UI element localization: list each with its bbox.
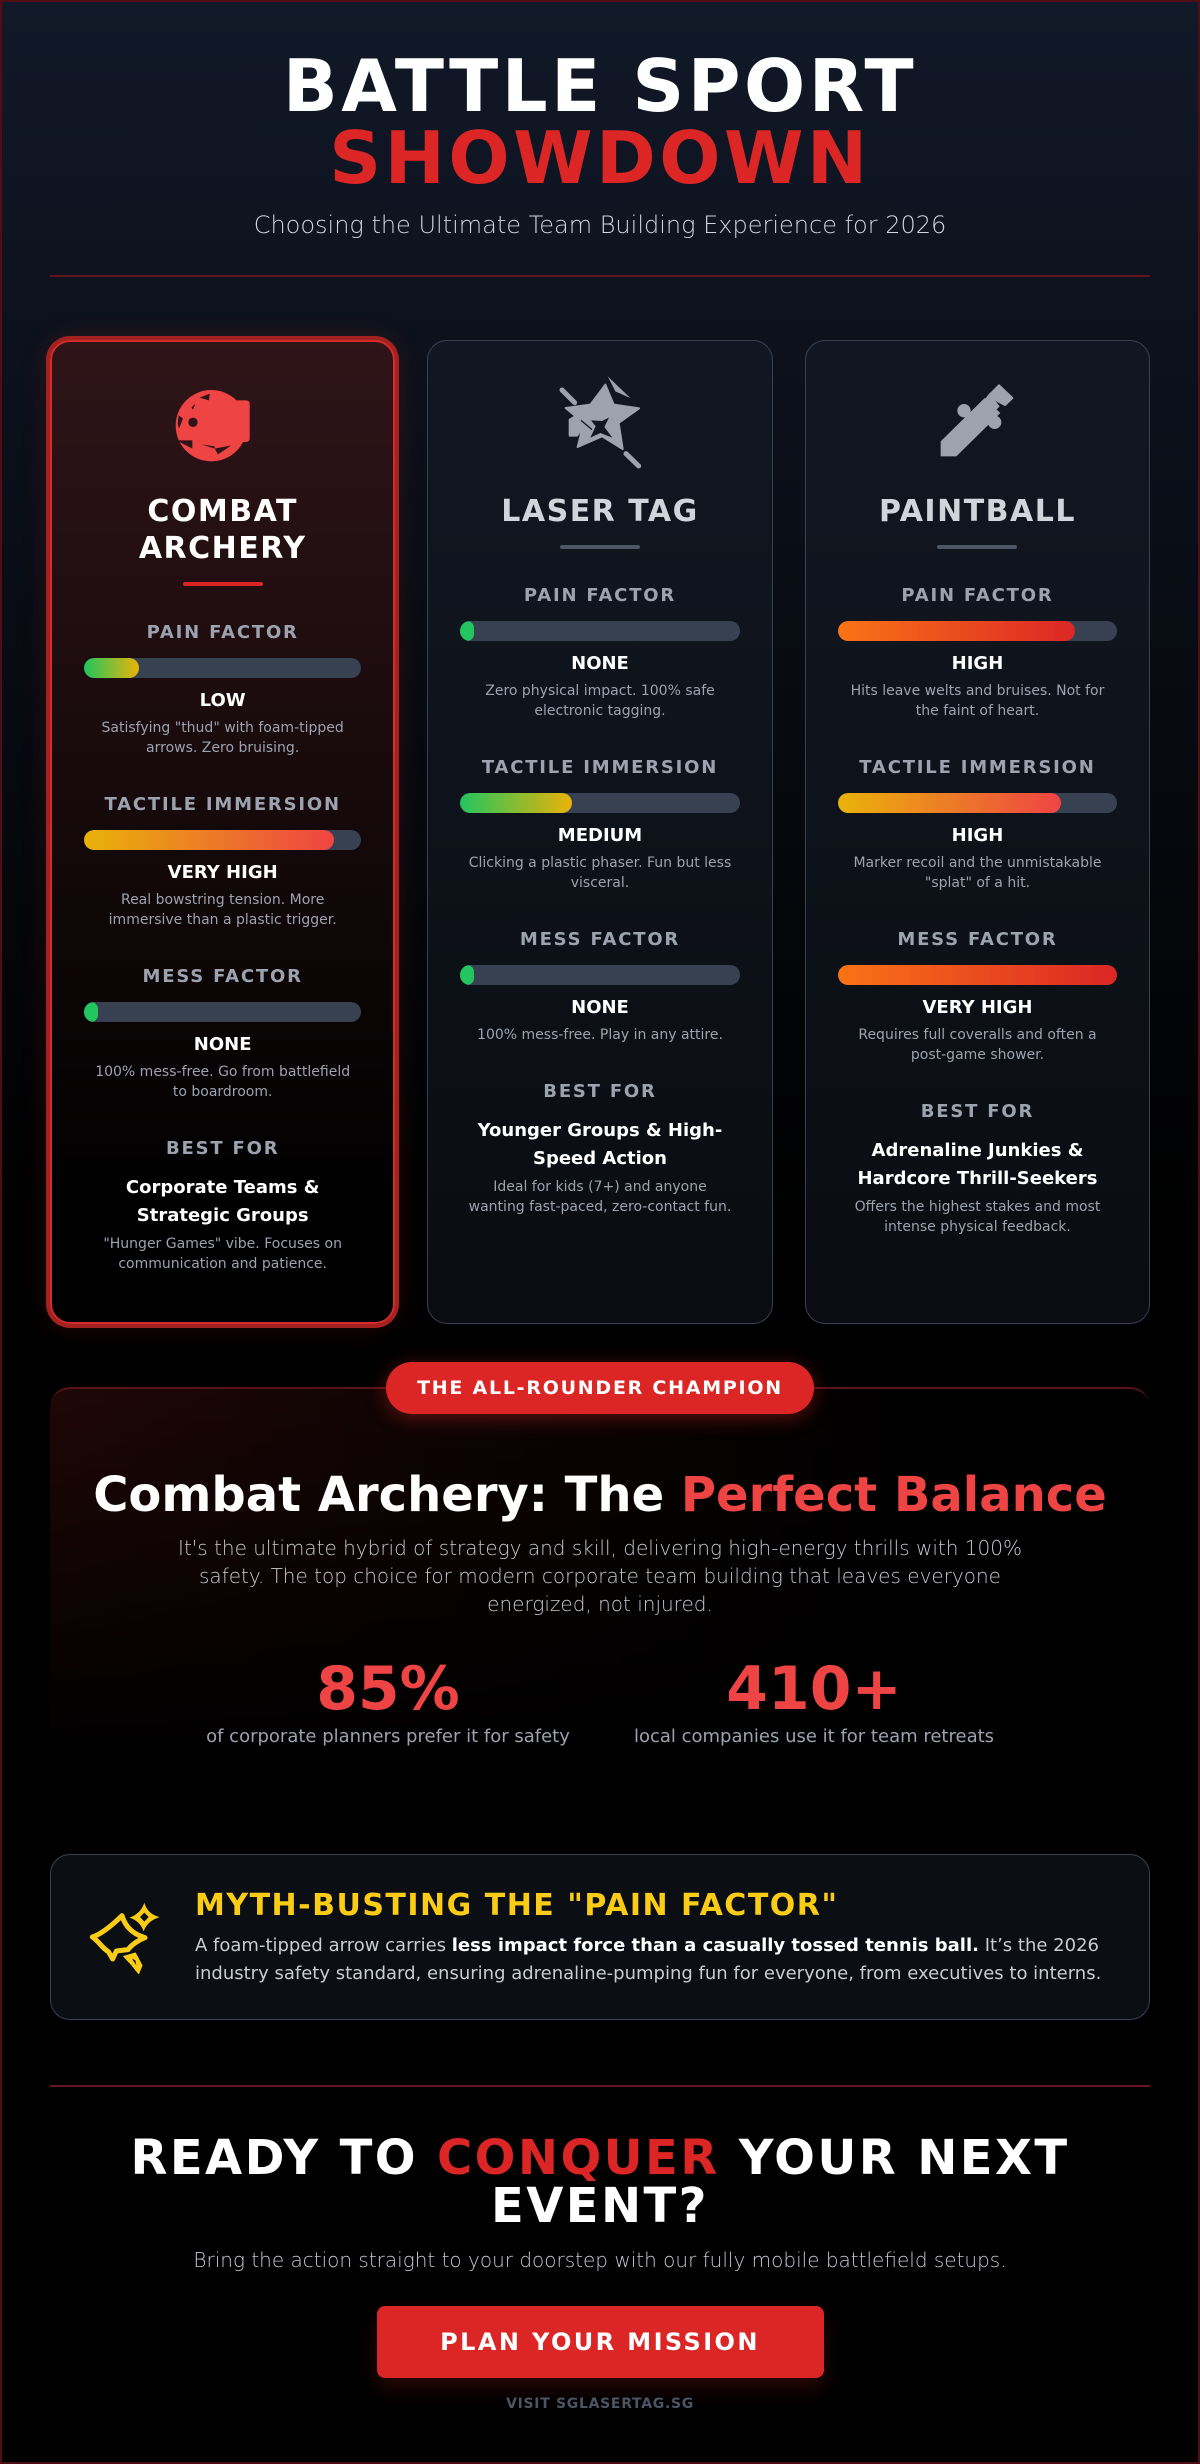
metric: pain factor: NONE [571,653,629,674]
champion description: safety. The top choice for modern corporate team building that leaves everyone [199,1564,1001,1588]
stat: 85%: 85% [316,1654,460,1724]
metric: mess factor: 100% mess-free. Go from battlefield [95,1064,350,1080]
card title: LASER TAG [501,494,699,529]
card title: ARCHERY [139,531,306,566]
best for: Speed Action [533,1148,667,1169]
card title: COMBAT [147,494,298,529]
subtitle: Choosing the Ultimate Team Building Experience for 2026 [254,211,946,239]
footer link: VISIT SGLASERTAG.SG [506,2396,694,2412]
card title: PAINTBALL [879,494,1076,529]
button: plan your mission [376,2306,824,2378]
metric: mess factor: VERY HIGH [922,997,1032,1018]
best for: communication and patience. [118,1256,327,1272]
best for: "Hunger Games" vibe. Focuses on [103,1236,342,1252]
metric: pain factor [84,622,361,756]
panel: champion [50,1387,1150,1659]
metric: mess factor: post-game shower. [911,1047,1044,1063]
call to action subtext: Bring the action straight to your doorstep with our fully mobile battlefield setups. [193,2248,1007,2272]
metric: mess factor: MESS FACTOR [897,929,1058,950]
metric: tactile immersion: immersive than a plastic trigger. [109,912,337,928]
metric: tactile immersion: "splat" of a hit. [925,875,1030,891]
best for: Offers the highest stakes and most [855,1199,1100,1215]
metric: tactile immersion: Clicking a plastic phaser. Fun but less [469,855,731,871]
panel: combat archery [50,340,395,1324]
metric: mess factor [838,929,1117,1063]
myth heading: MYTH-BUSTING THE "PAIN FACTOR" [195,1888,839,1923]
stat: 85% [206,1654,570,1747]
metric: tactile immersion: TACTILE IMMERSION [859,757,1096,778]
badge: all-rounder champion: THE ALL-ROUNDER CHAMPION [417,1377,783,1399]
metric: tactile immersion [84,794,361,928]
metric: pain factor: PAIN FACTOR [524,585,676,606]
icon: sparkle impact [90,1902,160,1974]
champion description [178,1536,1022,1616]
metric: pain factor: the faint of heart. [916,703,1039,719]
metric: mess factor [84,966,361,1100]
metric: tactile immersion [838,757,1117,891]
panel: myth-busting [50,1854,1150,2020]
icon: target with arrow [176,390,250,462]
icon: laser tag star [560,376,642,468]
metric: pain factor: HIGH [952,653,1003,674]
metric: pain factor: Satisfying "thud" with foam-tipped [102,720,344,736]
metric: mess factor: MESS FACTOR [520,929,680,950]
best for [855,1101,1100,1235]
badge: all-rounder champion [386,1362,814,1414]
metric: pain factor: PAIN FACTOR [147,622,299,643]
stat: 410+: local companies use it for team retreats [634,1726,994,1747]
best for: Younger Groups & High- [478,1120,722,1141]
stat: 85%: of corporate planners prefer it for safety [206,1726,570,1747]
best for: BEST FOR [921,1101,1034,1122]
title [283,44,917,200]
metric: tactile immersion: MEDIUM [558,825,642,846]
best for: Corporate Teams & [126,1177,319,1198]
best for: BEST FOR [166,1138,279,1159]
metric: tactile immersion: Marker recoil and the unmistakable [853,855,1102,871]
metric: pain factor: PAIN FACTOR [901,585,1054,606]
metric: tactile immersion: TACTILE IMMERSION [482,757,718,778]
stat: 410+: 410+ [726,1654,902,1724]
myth text [195,1934,1101,1984]
best for: BEST FOR [543,1081,657,1102]
best for: wanting fast-paced, zero-contact fun. [469,1199,731,1215]
metric: pain factor: arrows. Zero bruising. [146,740,299,756]
call to action heading: EVENT? [491,2178,709,2234]
card title [139,494,306,566]
panel: laser tag [427,340,773,1324]
metric: tactile immersion: TACTILE IMMERSION [104,794,341,815]
metric: pain factor: LOW [200,690,246,711]
metric: tactile immersion: Real bowstring tension. More [121,892,324,908]
metric: mess factor: NONE [571,997,629,1018]
metric: mess factor: Requires full coveralls and often a [858,1027,1097,1043]
panel: paintball [805,340,1150,1324]
metric: mess factor: NONE [194,1034,252,1055]
myth text: A foam-tipped arrow carries less impact force than a casually tossed tennis ball. It’s the 2026 [195,1934,1099,1956]
best for: Strategic Groups [137,1205,309,1226]
button: plan your mission: PLAN YOUR MISSION [440,2328,760,2356]
metric: tactile immersion: HIGH [952,825,1003,846]
icon: paintball marker [940,384,1014,456]
metric: pain factor: Hits leave welts and bruises. Not for [851,683,1104,699]
best for [103,1138,342,1272]
metric: pain factor [838,585,1117,719]
metric: mess factor: to boardroom. [173,1084,272,1100]
metric: tactile immersion [460,757,740,891]
title: BATTLE SPORT [283,44,917,128]
stat: 410+ [634,1654,994,1747]
metric: pain factor: Zero physical impact. 100% safe [485,683,715,699]
champion description: energized, not injured. [487,1592,713,1616]
best for [469,1081,731,1215]
myth text: industry safety standard, ensuring adrenaline-pumping fun for everyone, from executives to interns. [195,1962,1101,1984]
metric: mess factor: MESS FACTOR [143,966,303,987]
best for: Hardcore Thrill-Seekers [857,1168,1097,1189]
metric: pain factor: electronic tagging. [534,703,666,719]
metric: pain factor [460,585,740,719]
metric: tactile immersion: visceral. [571,875,629,891]
best for: intense physical feedback. [884,1219,1071,1235]
metric: tactile immersion: VERY HIGH [168,862,278,883]
metric: mess factor [460,929,740,1043]
call to action heading: READY TO CONQUER YOUR NEXT [130,2130,1070,2186]
champion heading: Combat Archery: The Perfect Balance [93,1467,1107,1523]
best for: Adrenaline Junkies & [872,1140,1083,1161]
call to action heading [130,2130,1070,2234]
title: SHOWDOWN [329,116,871,200]
champion description: It's the ultimate hybrid of strategy and skill, delivering high-energy thrills with 100% [178,1536,1022,1560]
best for: Ideal for kids (7+) and anyone [493,1179,707,1195]
metric: mess factor: 100% mess-free. Play in any attire. [477,1027,723,1043]
